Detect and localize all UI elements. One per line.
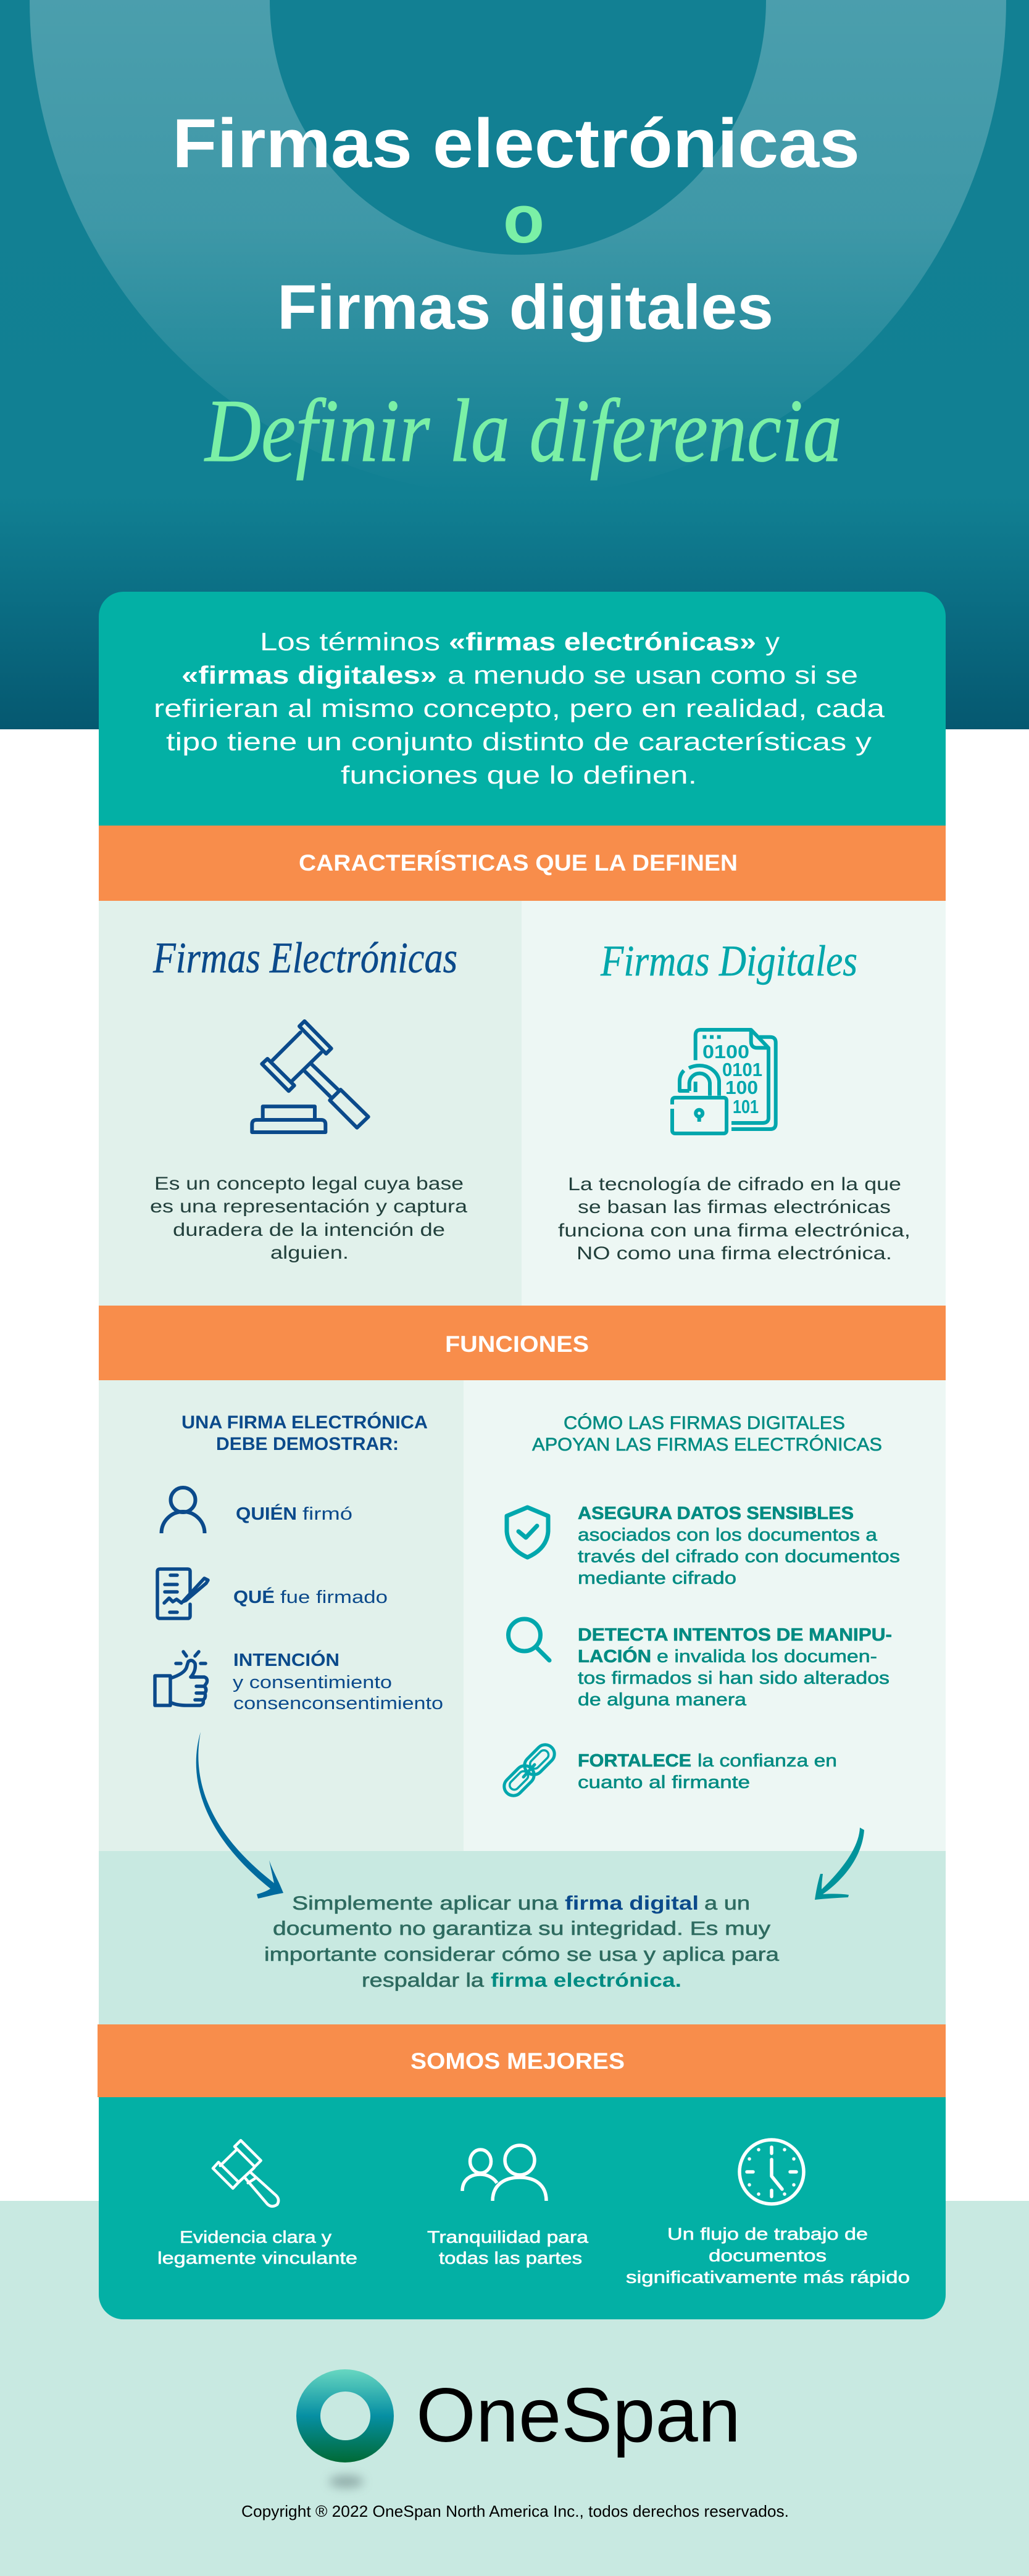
callout text: firma electrónica. — [491, 1969, 681, 1991]
logo mark — [296, 2369, 394, 2462]
benefit: flujo: documentos — [709, 2246, 827, 2265]
heading: DEBE DEMOSTRAR: — [216, 1434, 399, 1454]
callout text: respaldar la — [362, 1969, 485, 1991]
item: qué: fue firmado — [280, 1588, 388, 1607]
heading: Firmas Digitales — [600, 937, 857, 985]
icon: white gavel — [213, 2140, 278, 2206]
panel: firmas digitales — [522, 901, 946, 1306]
section bar: funciones: FUNCIONES — [445, 1331, 589, 1357]
logo: OneSpan — [296, 2369, 741, 2488]
icon: person — [162, 1488, 205, 1533]
heading — [181, 1412, 428, 1454]
callout text: Simplemente aplicar una — [292, 1892, 559, 1914]
description: duradera de la intención de — [173, 1220, 445, 1240]
item: detecta: de alguna manera — [578, 1690, 747, 1710]
panel: firmas electrónicas — [99, 901, 522, 1306]
item: detecta: LACIÓN — [578, 1646, 651, 1667]
icon: encrypted document — [672, 1030, 776, 1133]
logo shadow — [329, 2475, 364, 2488]
intro text: tipo tiene un conjunto distinto de características y — [166, 727, 872, 756]
panel: callout — [99, 1851, 946, 2024]
item: qué — [233, 1586, 388, 1607]
heading: APOYAN LAS FIRMAS ELECTRÓNICAS — [532, 1435, 882, 1455]
heading: Firmas Electrónicas — [152, 934, 457, 982]
item: quién: firmó — [302, 1504, 352, 1524]
arrow: left — [196, 1732, 283, 1899]
arrow: right — [815, 1828, 864, 1900]
icon: magnifier — [509, 1619, 549, 1660]
item: qué: QUÉ — [233, 1586, 275, 1607]
item: detecta: DETECTA INTENTOS DE MANIPU- — [578, 1625, 892, 1645]
icon: people — [462, 2145, 546, 2201]
item: fortalece: cuanto al firmante — [578, 1773, 750, 1792]
icon: thumbs up — [155, 1652, 207, 1705]
benefit: flujo: Un flujo de trabajo de — [667, 2224, 868, 2243]
item: fortalece: FORTALECE — [578, 1751, 691, 1771]
intro text: y — [765, 627, 780, 656]
item: detecta: tos firmados si han sido alterados — [578, 1668, 889, 1688]
description: funciona con una firma electrónica, — [558, 1220, 910, 1241]
benefit: flujo: significativamente más rápido — [626, 2267, 910, 2287]
wordmark: OneSpan — [416, 2373, 741, 2458]
heading — [532, 1413, 882, 1455]
title: o — [503, 181, 544, 257]
item: detecta: e invalida los documen- — [657, 1647, 877, 1667]
callout text: importante considerar cómo se usa y aplica para — [264, 1943, 780, 1965]
item: fortalece: la confianza en — [698, 1751, 837, 1771]
intro text: a menudo se usan como si se — [448, 661, 858, 689]
callout text: a un — [704, 1892, 750, 1914]
icon: chain — [501, 1741, 558, 1799]
item: asegura: ASEGURA DATOS SENSIBLES — [578, 1504, 854, 1523]
description — [558, 1174, 910, 1264]
icon: clock — [739, 2140, 804, 2204]
item: intención: consenconsentimiento — [233, 1694, 443, 1713]
item: quién: QUIÉN — [236, 1503, 297, 1524]
copyright: Copyright ® 2022 OneSpan North America Inc., todos derechos reservados. — [241, 2502, 789, 2520]
intro text — [154, 627, 885, 789]
icon: encrypted document: 0100 — [702, 1041, 749, 1062]
section bar: somos mejores — [98, 2024, 946, 2097]
title: Firmas electrónicas — [172, 105, 860, 182]
intro text: «firmas digitales» — [181, 661, 437, 689]
item: fortalece — [578, 1751, 837, 1792]
intro text: Los términos — [260, 627, 440, 656]
description: se basan las firmas electrónicas — [578, 1197, 891, 1217]
description: alguien. — [270, 1243, 349, 1263]
intro text: «firmas electrónicas» — [449, 627, 756, 656]
description: NO como una firma electrónica. — [577, 1243, 892, 1264]
panel: beneficios — [99, 2097, 946, 2319]
benefit: evidencia: legamente vinculante — [157, 2248, 357, 2267]
benefit: tranquilidad: Tranquilidad para — [427, 2227, 588, 2247]
benefit: evidencia: Evidencia clara y — [180, 2227, 331, 2247]
description: Es un concepto legal cuya base — [154, 1174, 464, 1194]
section bar: características — [99, 826, 946, 901]
callout text: firma digital — [565, 1892, 699, 1914]
item: asegura — [578, 1504, 900, 1588]
header background — [0, 0, 1029, 729]
benefit: flujo — [626, 2224, 910, 2287]
section bar: funciones — [99, 1306, 946, 1380]
item: asegura: asociados con los documentos a — [578, 1525, 878, 1545]
subtitle: Definir la diferencia — [204, 381, 842, 481]
title: Firmas digitales — [277, 272, 773, 342]
item: detecta — [578, 1625, 892, 1710]
description: La tecnología de cifrado en la que — [568, 1174, 901, 1195]
section bar: características: CARACTERÍSTICAS QUE LA DEFINEN — [299, 850, 738, 876]
icon: shield — [507, 1507, 548, 1557]
benefit: tranquilidad — [427, 2227, 588, 2267]
footer background band — [0, 2201, 1029, 2576]
item: intención: y consentimiento — [233, 1673, 392, 1692]
icon: encrypted document: 0101 — [722, 1059, 762, 1080]
icon: signed document — [157, 1569, 208, 1618]
item: quién — [236, 1503, 352, 1524]
description: es una representación y captura — [150, 1196, 468, 1217]
benefit: evidencia — [157, 2227, 357, 2267]
panel: cómo las firmas digitales apoyan — [464, 1380, 946, 1851]
item: intención — [233, 1649, 443, 1713]
panel: intro — [99, 592, 946, 826]
benefit: tranquilidad: todas las partes — [439, 2248, 582, 2267]
item: intención: INTENCIÓN — [233, 1649, 340, 1670]
item: asegura: mediante cifrado — [578, 1568, 736, 1588]
heading: UNA FIRMA ELECTRÓNICA — [181, 1412, 428, 1433]
callout text: documento no garantiza su integridad. Es muy — [273, 1917, 770, 1939]
heading: CÓMO LAS FIRMAS DIGITALES — [564, 1413, 845, 1433]
icon: gavel — [252, 1021, 369, 1132]
panel: una firma electrónica debe demostrar — [99, 1380, 464, 1851]
icon: encrypted document: 100 — [725, 1077, 758, 1098]
intro text: refirieran al mismo concepto, pero en realidad, cada — [154, 694, 885, 723]
title — [172, 105, 860, 342]
icon: encrypted document: 101 — [733, 1096, 759, 1117]
section bar: somos mejores: SOMOS MEJORES — [410, 2048, 625, 2074]
item: asegura: través del cifrado con documentos — [578, 1547, 900, 1567]
description — [150, 1174, 468, 1263]
callout text — [264, 1892, 780, 1991]
intro text: funciones que lo definen. — [341, 761, 697, 789]
